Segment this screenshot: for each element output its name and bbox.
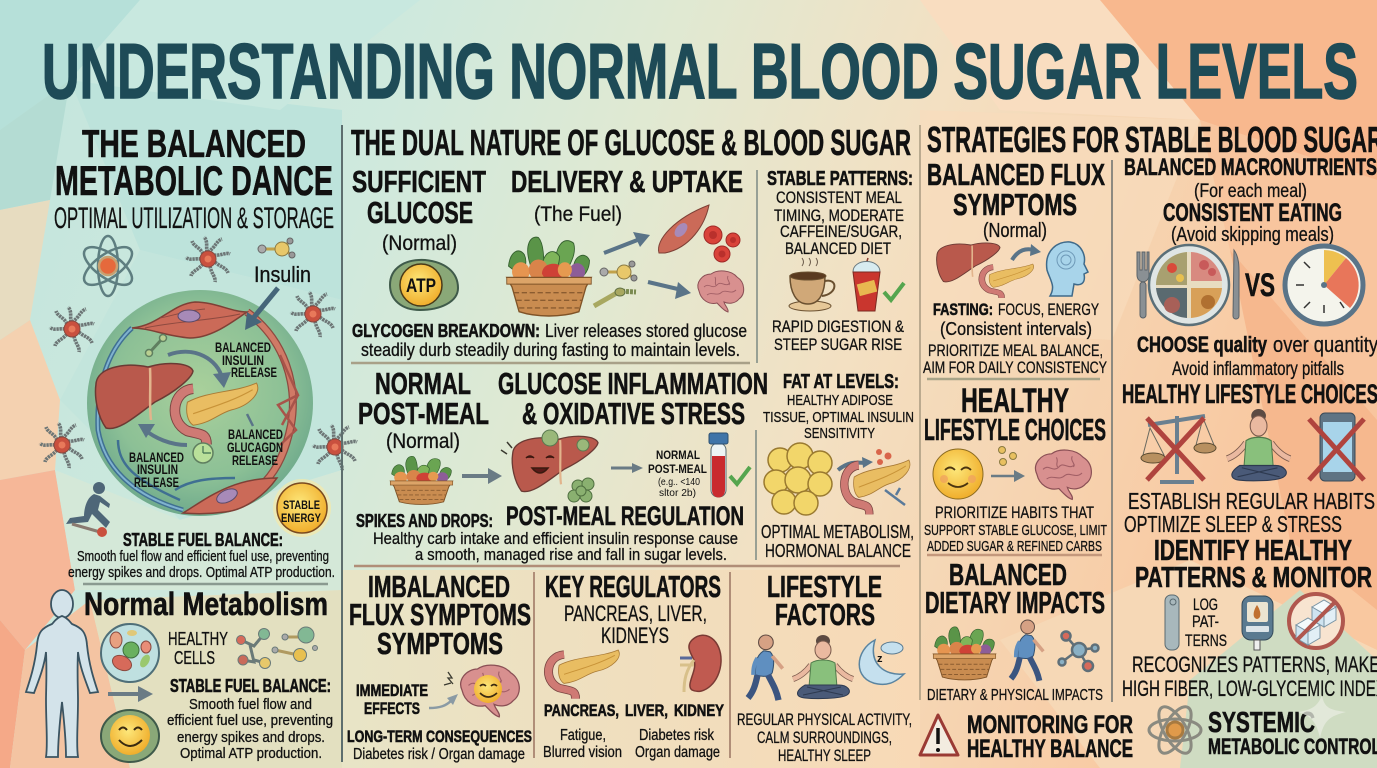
label: insulin: Insulin bbox=[254, 262, 311, 287]
label: rapid digestion bbox=[772, 317, 905, 354]
text: organ labels: Organ damage bbox=[635, 744, 720, 761]
heading: identify patterns bbox=[1135, 535, 1372, 594]
icon: red drink bbox=[853, 258, 880, 311]
icon: happy cell bbox=[101, 710, 159, 762]
heading: balanced dietary impacts bbox=[925, 557, 1105, 620]
icon: warning bbox=[920, 715, 958, 755]
panel: the balanced metabolic dance bbox=[40, 123, 357, 581]
heading: glucose inflammation: & OXIDATIVE STRESS bbox=[522, 396, 745, 431]
label: healthy cells: CELLS bbox=[174, 648, 215, 668]
label: normal post-meal: sltor 2b) bbox=[659, 488, 696, 499]
icon: dumbbell molecule bbox=[146, 334, 166, 356]
icon: glucometer bbox=[1242, 596, 1273, 650]
text: stable fuel balance: STABLE FUEL BALANCE: bbox=[123, 530, 283, 550]
icon: green cluster bbox=[568, 478, 594, 502]
heading: balanced flux symptoms: SYMPTOMS bbox=[953, 187, 1077, 222]
heading: glucose inflammation: GLUCOSE INFLAMMATION bbox=[498, 366, 768, 401]
heading: normal post-meal: (Normal) bbox=[386, 430, 460, 453]
icon: walker bbox=[748, 635, 783, 700]
icon: liver and pancreas bbox=[937, 243, 1041, 298]
heading: balanced flux symptoms bbox=[927, 157, 1105, 242]
badge: stable energy: STABLE bbox=[283, 498, 320, 512]
heading: balanced metabolic dance: METABOLIC DANCE bbox=[55, 157, 333, 204]
text: spikes and drops: Healthy carb intake and efficient insulin response cause bbox=[373, 529, 738, 548]
decoration: sparkle bbox=[1298, 695, 1346, 738]
text: stable fuel balance: efficient fuel use, preventing bbox=[167, 712, 333, 729]
arrow bbox=[462, 468, 502, 484]
label: immediate effects: IMMEDIATE bbox=[356, 681, 428, 700]
icon: fat cells bbox=[764, 443, 832, 515]
icon: moon and cloud bbox=[859, 640, 904, 684]
icon: pancreas with arrow bbox=[838, 449, 910, 514]
text: glycogen breakdown bbox=[352, 321, 747, 360]
label: normal post-meal: NORMAL bbox=[656, 448, 700, 462]
label: normal post-meal: (e.g.. <140 bbox=[658, 477, 700, 488]
label: rapid digestion: RAPID DIGESTION & bbox=[772, 317, 905, 336]
text: choose quality bbox=[1137, 332, 1377, 380]
text: fasting: FOCUS, ENERGY bbox=[998, 300, 1099, 319]
panel: imbalanced flux symptoms bbox=[347, 569, 532, 763]
text: monitoring for healthy balance bbox=[967, 711, 1133, 763]
heading: imbalanced flux: SYMPTOMS bbox=[377, 626, 503, 661]
label: dietary impacts: DIETARY & PHYSICAL IMPACTS bbox=[927, 687, 1103, 704]
text: fat at levels: FAT AT LEVELS: bbox=[783, 371, 899, 393]
icon: plate bbox=[1149, 245, 1229, 325]
heading: key regulators: KEY REGULATORS bbox=[545, 569, 721, 604]
label: balanced glucagon release: RELEASE bbox=[232, 452, 278, 468]
heading: delivery and uptake bbox=[511, 164, 743, 226]
text: stable fuel balance: energy spikes and drops. bbox=[177, 729, 325, 746]
text: long-term consequences: LONG-TERM CONSEQUENCES bbox=[347, 727, 532, 746]
icon: kidney bbox=[680, 635, 721, 692]
icon: meditating person bbox=[793, 635, 853, 699]
text: lifestyle factors list bbox=[737, 710, 912, 765]
icon: pancreas bbox=[548, 650, 619, 699]
icon: knife bbox=[1233, 250, 1239, 319]
label: balanced insulin release lower: BALANCED bbox=[129, 449, 184, 465]
text: lifestyle factors list: REGULAR PHYSICAL ACTIVITY, bbox=[737, 710, 912, 729]
icon: brain bbox=[1036, 450, 1091, 499]
heading: normal metabolism: Normal Metabolism bbox=[84, 586, 328, 622]
text: lifestyle factors list: CALM SURROUNDINGS, bbox=[757, 728, 892, 747]
icon: insulin molecule bbox=[258, 238, 295, 258]
text: stable patterns: CAFFEINE/SUGAR, bbox=[780, 222, 902, 241]
text: prioritize habits: ADDED SUGAR & REFINED CARBS bbox=[927, 538, 1102, 555]
icon: moon and cloud: z bbox=[877, 653, 883, 665]
heading: healthy lifestyle choices bbox=[924, 382, 1106, 447]
text: organ labels: KIDNEY bbox=[674, 701, 725, 720]
label: balanced insulin release lower: INSULIN bbox=[137, 461, 178, 477]
text: fat at levels: HEALTHY ADIPOSE bbox=[787, 392, 893, 409]
text: spikes and drops: POST-MEAL REGULATION bbox=[506, 501, 744, 531]
icon: basket bbox=[507, 237, 591, 316]
text: choose quality: CHOOSE quality bbox=[1137, 332, 1268, 357]
icon: coffee cup bbox=[789, 258, 834, 311]
label: log patterns: PAT- bbox=[1192, 612, 1219, 631]
text: systemic metabolic control: SYSTEMIC bbox=[1208, 707, 1315, 739]
label: log patterns bbox=[1185, 595, 1227, 650]
icon: blood tube bbox=[709, 433, 728, 498]
arrow bbox=[611, 463, 643, 473]
icon: small basket bbox=[390, 456, 453, 504]
label: rapid digestion: STEEP SUGAR RISE bbox=[774, 335, 902, 354]
heading: balanced flux symptoms: (Normal) bbox=[983, 220, 1047, 242]
icon: brain bbox=[698, 271, 744, 312]
icon: systemic atom bbox=[1149, 702, 1201, 758]
text: spikes and drops: SPIKES AND DROPS: bbox=[356, 511, 493, 531]
label: optimal metabolism: OPTIMAL METABOLISM, bbox=[761, 522, 914, 542]
heading: sufficient glucose bbox=[352, 164, 486, 255]
heading: sufficient glucose: (Normal) bbox=[382, 232, 457, 255]
icon: phone crossed out bbox=[1309, 413, 1364, 481]
label: log patterns: TERNS bbox=[1185, 631, 1227, 650]
badge: stable energy bbox=[273, 479, 331, 537]
heading: macronutrients: (For each meal) bbox=[1194, 181, 1307, 202]
text: organ labels: PANCREAS, bbox=[544, 701, 619, 720]
arrow: to brain bbox=[991, 446, 1025, 482]
label: log patterns: LOG bbox=[1193, 595, 1218, 614]
label: healthy cells: HEALTHY bbox=[168, 629, 228, 649]
heading: imbalanced flux bbox=[349, 569, 531, 661]
arrow head bbox=[245, 312, 262, 330]
text: glycogen breakdown: Liver releases stored glucose bbox=[545, 321, 747, 341]
label: optimal metabolism bbox=[761, 522, 914, 561]
text: stable patterns: STABLE PATTERNS: bbox=[767, 168, 913, 190]
heading: lifestyle factors: LIFESTYLE bbox=[767, 569, 882, 604]
label: balanced insulin release: RELEASE bbox=[231, 364, 277, 380]
panel: strategies for stable blood sugar bbox=[920, 119, 1377, 763]
text: organ labels: LIVER, bbox=[625, 701, 668, 720]
label: balanced insulin release bbox=[215, 339, 277, 380]
icon: clock bbox=[1285, 246, 1363, 324]
text: fasting: (Consistent intervals) bbox=[940, 319, 1092, 339]
heading: lifestyle factors bbox=[767, 569, 882, 632]
panel: normal metabolism bbox=[26, 584, 333, 762]
text: stable patterns bbox=[767, 168, 913, 258]
icon: log strip bbox=[1165, 595, 1179, 650]
label: immediate effects bbox=[356, 681, 428, 718]
text: organ labels: Diabetes risk bbox=[639, 727, 715, 744]
panel: dual nature of glucose bbox=[351, 122, 914, 566]
heading: normal post-meal bbox=[358, 366, 489, 453]
text: fasting: PRIORITIZE MEAL BALANCE, bbox=[928, 341, 1103, 360]
panel: key regulators bbox=[543, 569, 725, 761]
text: fat at levels bbox=[763, 371, 914, 442]
heading: imbalanced flux: IMBALANCED bbox=[368, 569, 510, 604]
label: healthy cells bbox=[168, 629, 228, 668]
text: organ labels bbox=[543, 701, 725, 761]
text: prioritize habits: PRIORITIZE HABITS THAT bbox=[935, 503, 1094, 522]
label: balanced glucagon release bbox=[227, 426, 283, 468]
arrow: to liver bbox=[145, 430, 187, 445]
icon: atom bbox=[78, 236, 138, 296]
heading: balanced metabolic dance: OPTIMAL UTILIZATION & STORAGE bbox=[54, 202, 334, 235]
icon: ATP cell bbox=[390, 260, 458, 310]
text: prioritize habits bbox=[924, 503, 1107, 555]
text: fasting: FASTING: bbox=[933, 300, 993, 319]
text: prioritize habits: SUPPORT STABLE GLUCOSE, LIMIT bbox=[924, 522, 1107, 539]
label: balanced insulin release lower bbox=[129, 449, 184, 490]
text: stable fuel balance: Smooth fuel flow and efficient fuel use, preventing bbox=[77, 548, 329, 565]
icon: meditating person bbox=[1227, 409, 1290, 481]
heading: balanced metabolic dance: THE BALANCED bbox=[82, 123, 306, 166]
text: stable fuel balance bbox=[68, 530, 335, 581]
icon: basket bbox=[933, 627, 996, 680]
text: monitoring for healthy balance: MONITORING FOR bbox=[967, 711, 1133, 739]
heading: macronutrients bbox=[1124, 154, 1377, 246]
label: optimal metabolism: HORMONAL BALANCE bbox=[765, 541, 911, 561]
label: normal post-meal: POST-MEAL bbox=[648, 462, 707, 476]
text: glycogen breakdown: steadily durb steadily during fasting to maintain levels. bbox=[361, 340, 740, 360]
heading: balanced flux symptoms: BALANCED FLUX bbox=[927, 157, 1105, 192]
text: stable patterns: BALANCED DIET bbox=[785, 239, 891, 258]
icon: happy brain bbox=[444, 665, 519, 717]
heading: balanced dietary impacts: BALANCED bbox=[949, 557, 1067, 592]
label: balanced insulin release lower: RELEASE bbox=[134, 474, 179, 490]
icon: no sugar bbox=[1289, 594, 1343, 648]
text: lifestyle factors list: HEALTHY SLEEP bbox=[778, 746, 871, 765]
arrow bbox=[108, 686, 153, 702]
heading: balanced dietary impacts: DIETARY IMPACTS bbox=[925, 585, 1105, 620]
heading: delivery and uptake: DELIVERY & UPTAKE bbox=[511, 164, 743, 199]
arrow: insulin to muscle bbox=[250, 288, 278, 322]
text: fasting: AIM FOR DAILY CONSISTENCY bbox=[923, 358, 1107, 377]
text: stable fuel balance: energy spikes and drops. Optimal ATP production. bbox=[68, 564, 335, 581]
text: stable fuel balance: Optimal ATP production. bbox=[180, 745, 322, 762]
text: stable fuel balance: Smooth fuel flow and bbox=[189, 696, 312, 713]
icon: head with focus bbox=[1047, 242, 1088, 296]
arrow: small up bbox=[247, 414, 253, 426]
heading: imbalanced flux: FLUX SYMPTOMS bbox=[349, 597, 531, 632]
subheading: organs bbox=[564, 601, 707, 648]
arrowhead bbox=[138, 424, 155, 438]
heading: sufficient glucose: SUFFICIENT bbox=[352, 164, 486, 199]
badge: stable energy: ENERGY bbox=[281, 511, 321, 525]
text: recognizes patterns bbox=[1122, 652, 1377, 701]
icons: spiky cells bbox=[40, 237, 357, 470]
icon: scale crossed out bbox=[1141, 416, 1216, 482]
heading: macronutrients: (Avoid skipping meals) bbox=[1171, 224, 1334, 246]
text: long-term consequences: Diabetes risk / Organ damage bbox=[353, 746, 525, 763]
arrow bbox=[429, 694, 458, 708]
heading: normal post-meal: NORMAL bbox=[375, 366, 471, 401]
label: balanced insulin release: BALANCED bbox=[215, 339, 271, 355]
heading: balanced metabolic dance bbox=[54, 123, 334, 235]
arrows and fuel targets bbox=[594, 205, 740, 306]
subheading: organs: PANCREAS, LIVER, bbox=[564, 601, 707, 626]
heading: sufficient glucose: GLUCOSE bbox=[367, 195, 473, 230]
icon: healthy cell bbox=[101, 624, 159, 682]
text: fat at levels: TISSUE, OPTIMAL INSULIN bbox=[763, 409, 914, 426]
icon: smiley bbox=[933, 449, 983, 499]
icon: small clock bbox=[193, 443, 213, 463]
icon: runner bbox=[66, 482, 110, 537]
text: stable patterns: CONSISTENT MEAL bbox=[776, 188, 902, 207]
icon: fork bbox=[1137, 252, 1149, 318]
heading: healthy lifestyle choices: HEALTHY bbox=[961, 382, 1069, 420]
text: long-term consequences bbox=[347, 727, 532, 763]
text: fat at levels: SENSITIVITY bbox=[804, 425, 875, 442]
text: glycogen breakdown: GLYCOGEN BREAKDOWN: bbox=[352, 321, 540, 341]
organ: pancreas bbox=[175, 383, 258, 444]
text: organ labels: Blurred vision bbox=[543, 744, 622, 761]
text: establish habits bbox=[1124, 488, 1375, 537]
icon: ATP cell: ATP bbox=[406, 276, 436, 297]
text: systemic metabolic control bbox=[1208, 707, 1377, 759]
icon: molecules bbox=[236, 627, 318, 668]
panel: lifestyle factors bbox=[737, 569, 912, 765]
icon: human body bbox=[26, 590, 98, 757]
heading: dual nature: THE DUAL NATURE OF GLUCOSE & BLOOD SUGAR bbox=[351, 122, 911, 163]
label: balanced insulin release: INSULIN bbox=[222, 352, 264, 368]
text: stable fuel balance bbox=[167, 676, 333, 762]
text: spikes and drops bbox=[356, 501, 744, 564]
label: balanced glucagon release: BALANCED bbox=[228, 426, 283, 442]
icon: molecule bbox=[1058, 632, 1098, 671]
heading: delivery and uptake: (The Fuel) bbox=[534, 203, 622, 226]
text: stable patterns: TIMING, MODERATE bbox=[774, 206, 904, 225]
arrow: to pancreas bbox=[168, 352, 222, 378]
organ: liver bbox=[95, 364, 193, 429]
icon: check bbox=[730, 467, 750, 484]
diagram: metabolic circle bbox=[87, 288, 313, 516]
label: immediate effects: EFFECTS bbox=[364, 699, 420, 718]
text: monitoring for healthy balance: HEALTHY BALANCE bbox=[967, 735, 1133, 763]
heading: healthy lifestyle choices: LIFESTYLE CHOICES bbox=[924, 412, 1106, 447]
heading: lifestyle factors: FACTORS bbox=[775, 597, 875, 632]
arrowhead bbox=[213, 372, 231, 388]
subheading: organs: KIDNEYS bbox=[601, 623, 669, 648]
text: fasting bbox=[923, 300, 1107, 377]
icon: walker bbox=[1011, 620, 1043, 681]
text: stable fuel balance: STABLE FUEL BALANCE: bbox=[170, 676, 331, 696]
icon: check bbox=[884, 283, 904, 300]
label: vs: VS bbox=[1245, 267, 1275, 303]
heading: normal post-meal: POST-MEAL bbox=[358, 396, 489, 431]
icon: happy liver bbox=[501, 430, 598, 492]
label: normal post-meal bbox=[648, 448, 707, 499]
label: balanced glucagon release: GLUCAGDN bbox=[227, 439, 283, 455]
text: organ labels: Fatigue, bbox=[560, 727, 606, 744]
heading: glucose inflammation bbox=[498, 366, 768, 431]
text: spikes and drops: a smooth, managed rise and fall in sugar levels. bbox=[415, 545, 727, 564]
